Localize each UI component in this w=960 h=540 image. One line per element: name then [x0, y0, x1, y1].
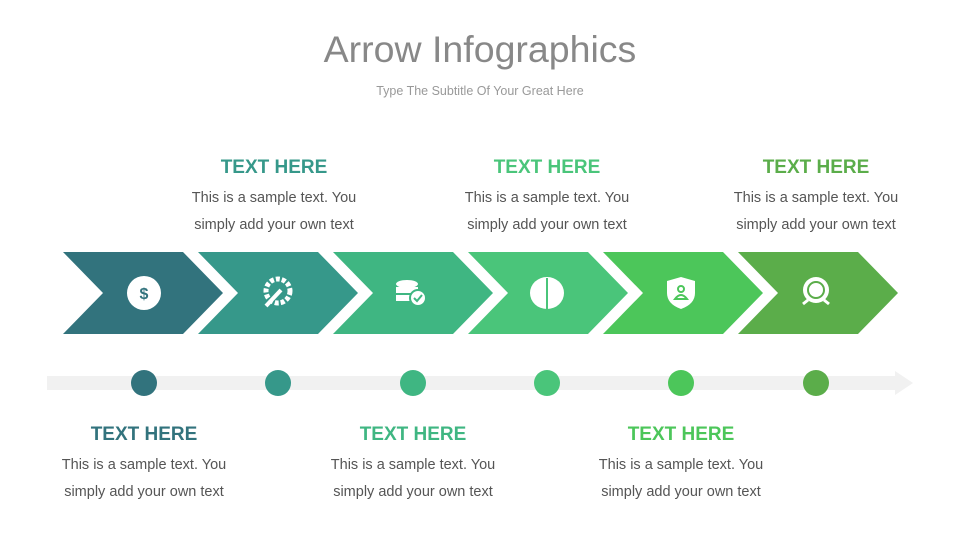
text block: bottom 3: TEXT HERE: [628, 424, 734, 445]
text block: top 2: This is a sample text. You: [465, 190, 629, 206]
chevron 1: $: [140, 286, 149, 303]
text block: bottom 1: simply add your own text: [64, 484, 224, 500]
timeline track: [47, 371, 913, 395]
chevron 5: [603, 252, 763, 334]
text block: top 2: TEXT HERE: [494, 157, 600, 178]
text block: bottom 2: [331, 424, 495, 500]
chevron 2: [198, 252, 358, 334]
text block: bottom 3: [599, 424, 763, 500]
text block: top 3: This is a sample text. You: [734, 190, 898, 206]
text block: top 3: simply add your own text: [736, 217, 896, 233]
text block: bottom 1: TEXT HERE: [91, 424, 197, 445]
text block: bottom 2: This is a sample text. You: [331, 457, 495, 473]
text block: bottom 3: simply add your own text: [601, 484, 761, 500]
text block: bottom 2: TEXT HERE: [360, 424, 466, 445]
chevron 4: [468, 252, 628, 334]
text block: top 1: simply add your own text: [194, 217, 354, 233]
text block: top 1: This is a sample text. You: [192, 190, 356, 206]
text block: bottom 1: [62, 424, 226, 500]
text block: top 3: TEXT HERE: [763, 157, 869, 178]
text block: top 2: simply add your own text: [467, 217, 627, 233]
chevron 1: [63, 252, 223, 334]
text block: top 3: [734, 157, 898, 233]
chevron 3: [333, 252, 493, 334]
timeline dots: [131, 370, 829, 396]
text block: top 1: TEXT HERE: [221, 157, 327, 178]
text block: top 2: [465, 157, 629, 233]
text block: top 1: [192, 157, 356, 233]
text block: bottom 1: This is a sample text. You: [62, 457, 226, 473]
text block: bottom 3: This is a sample text. You: [599, 457, 763, 473]
title: Arrow Infographics: [324, 28, 636, 70]
chevron 6: [738, 252, 898, 334]
text block: bottom 2: simply add your own text: [333, 484, 493, 500]
subtitle: Type The Subtitle Of Your Great Here: [376, 84, 584, 98]
